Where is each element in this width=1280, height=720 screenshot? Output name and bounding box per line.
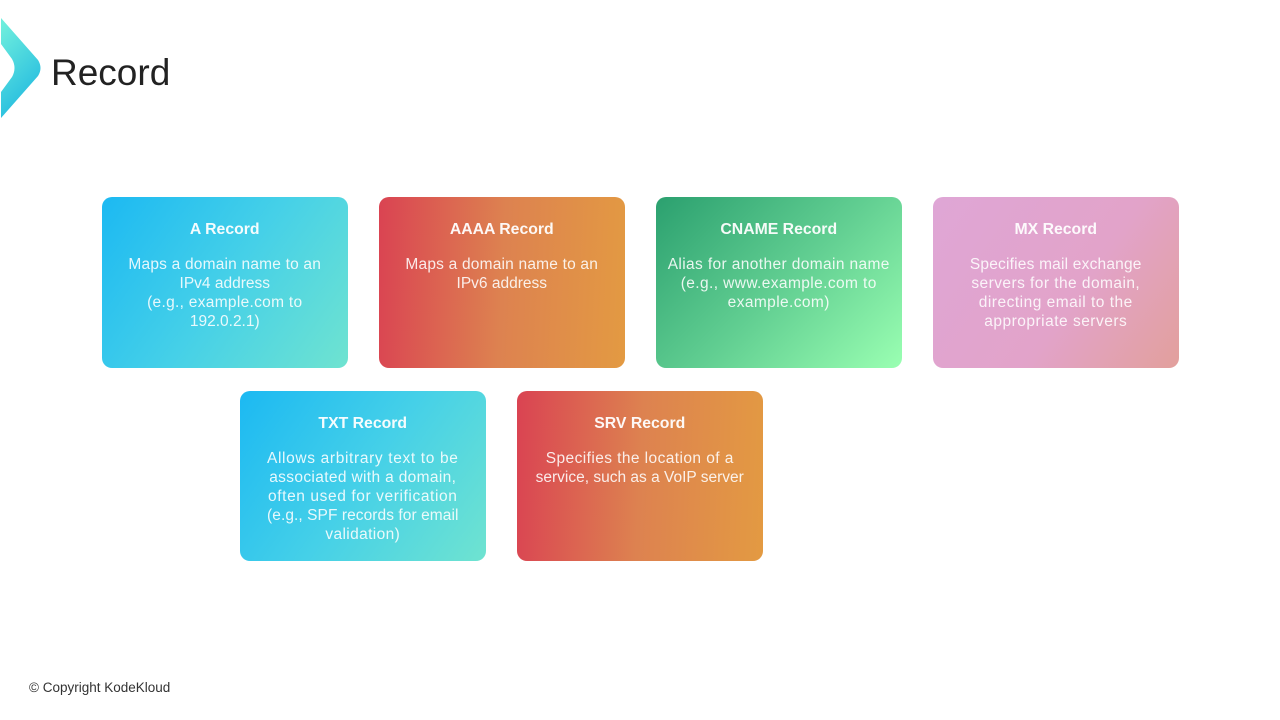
- panel: CNAME Record: Alias for another domain name: [668, 256, 890, 273]
- panel: SRV Record: [517, 391, 762, 561]
- panel: TXT Record: TXT Record: [318, 415, 407, 432]
- panel: TXT Record: associated with a domain,: [269, 469, 456, 486]
- panel: AAAA Record: [379, 197, 624, 368]
- copyright footer: © Copyright KodeKloud: [29, 680, 170, 695]
- panel: TXT Record: (e.g., SPF records for email: [267, 507, 458, 524]
- panel: TXT Record: often used for verification: [268, 488, 457, 505]
- panel: SRV Record: service, such as a VoIP server: [536, 469, 744, 486]
- panel: A Record: 192.0.2.1): [190, 313, 260, 330]
- panel: A Record: (e.g., example.com to: [147, 294, 302, 311]
- panel: CNAME Record: (e.g., www.example.com to: [681, 275, 877, 292]
- panel: TXT Record: Allows arbitrary text to be: [267, 450, 459, 467]
- panel: MX Record: [933, 197, 1178, 368]
- logo chevron icon: [1, 18, 40, 118]
- panel: A Record: A Record: [190, 221, 260, 238]
- panel: CNAME Record: [656, 197, 902, 368]
- title: Record: [51, 52, 170, 93]
- panel: CNAME Record: example.com): [728, 294, 830, 311]
- panel: TXT Record: validation): [325, 526, 400, 543]
- panel: MX Record: Specifies mail exchange: [970, 256, 1142, 273]
- panel: AAAA Record: Maps a domain name to an: [405, 256, 598, 273]
- panel: MX Record: directing email to the: [979, 294, 1133, 311]
- panel: TXT Record: [240, 391, 486, 561]
- panel: AAAA Record: AAAA Record: [450, 221, 554, 238]
- panel: A Record: Maps a domain name to an: [128, 256, 321, 273]
- panel: CNAME Record: CNAME Record: [720, 221, 837, 238]
- panel: MX Record: appropriate servers: [984, 313, 1127, 330]
- panel: MX Record: servers for the domain,: [971, 275, 1140, 292]
- panel: AAAA Record: IPv6 address: [457, 275, 547, 292]
- panel: SRV Record: Specifies the location of a: [546, 450, 734, 467]
- panel: SRV Record: SRV Record: [594, 415, 685, 432]
- panel: MX Record: MX Record: [1014, 221, 1097, 238]
- panel: A Record: [102, 197, 348, 368]
- panel: A Record: IPv4 address: [180, 275, 270, 292]
